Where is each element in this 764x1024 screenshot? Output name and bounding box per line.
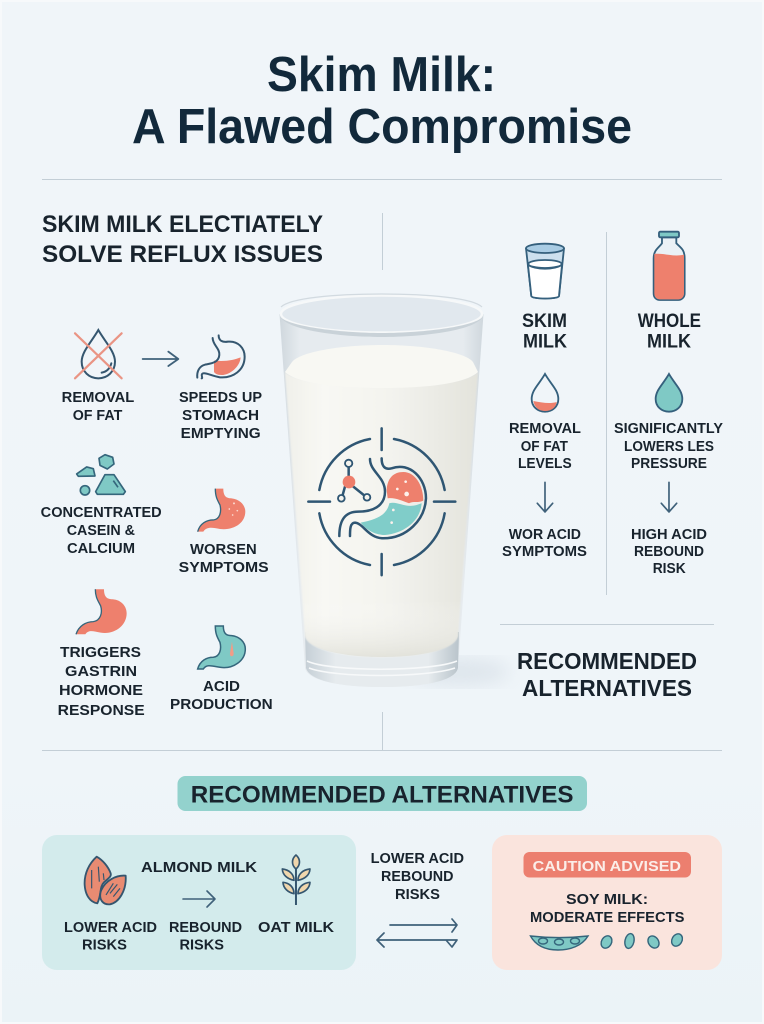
label: significantly lowers les pressure — [614, 421, 723, 472]
milk surface — [285, 345, 478, 388]
heading: recommended alternatives side: ALTERNATIVES — [522, 675, 692, 701]
panel: caution soy milk — [492, 835, 722, 970]
icon: low fat drop — [532, 374, 558, 412]
glass base — [305, 632, 459, 687]
label: worse acid symptoms: WOR ACID — [509, 527, 581, 543]
stomach fill: coral — [387, 472, 423, 503]
label: high acid rebound risk: REBOUND — [634, 544, 704, 560]
label: triggers gastrin hormone response: TRIGGERS — [60, 645, 141, 661]
label: lower acid rebound risks: RISKS — [395, 887, 440, 903]
label: removal of fat: OF FAT — [73, 408, 122, 424]
glass of milk — [280, 294, 510, 687]
label: significantly lowers les pressure: PRESSURE — [631, 456, 707, 472]
icon: almond — [85, 857, 126, 904]
label: skim milk: MILK — [523, 330, 567, 352]
panel: recommended milks: RISKS — [82, 938, 127, 954]
panel: recommended milks: RISKS — [180, 938, 224, 954]
label: concentrated casein and calcium: CONCENTRATED — [41, 505, 162, 521]
label: lower acid rebound risks: REBOUND — [381, 869, 454, 885]
label: worsen symptoms: SYMPTOMS — [179, 560, 269, 576]
label: removal of fat levels: OF FAT — [521, 439, 568, 455]
panel: recommended milks: ALMOND MILK — [141, 860, 258, 876]
arrows: exchange — [377, 919, 457, 947]
panel: recommended milks: LOWER ACID — [64, 920, 157, 936]
glass shadow — [410, 658, 510, 686]
glass body — [280, 314, 484, 687]
label: worse acid symptoms — [502, 527, 587, 560]
label: acid production: PRODUCTION — [170, 697, 273, 713]
stomach outline — [350, 458, 426, 538]
icon: irritated stomach — [198, 489, 245, 532]
label: triggers gastrin hormone response: GASTRIN — [65, 664, 137, 680]
panel: caution soy milk: SOY MILK: — [566, 892, 648, 908]
icon: fat drop crossed out — [75, 330, 122, 378]
label: high acid rebound risk: RISK — [653, 561, 686, 577]
icon: acid production stomach — [198, 626, 245, 669]
label: concentrated casein and calcium — [41, 505, 162, 557]
icon: skim milk glass — [526, 244, 564, 298]
label: worsen symptoms: WORSEN — [190, 542, 257, 558]
icon: stomach emptying — [197, 335, 245, 378]
label: whole milk — [638, 310, 701, 352]
heading: reflux issues: SKIM MILK ELECTIATELY — [42, 211, 323, 238]
heading: reflux issues — [42, 211, 323, 268]
label: skim milk — [522, 310, 567, 352]
target rings and ticks — [308, 428, 455, 575]
label: skim milk: SKIM — [522, 310, 567, 332]
label: worsen symptoms — [179, 542, 269, 576]
title — [132, 48, 632, 154]
badge: caution advised: CAUTION ADVISED — [533, 859, 681, 875]
panel: recommended milks: OAT MILK — [258, 920, 335, 936]
arrow: almond to oat — [183, 891, 215, 907]
label: lower acid rebound risks: LOWER ACID — [371, 851, 464, 867]
label: removal of fat levels: REMOVAL — [509, 421, 581, 437]
label: speeds up stomach emptying — [179, 390, 262, 442]
label: high acid rebound risk: HIGH ACID — [631, 527, 707, 543]
label: high acid rebound risk — [631, 527, 707, 577]
label: removal of fat levels: LEVELS — [518, 456, 572, 472]
panel: recommended milks: REBOUND — [169, 920, 242, 936]
label: whole milk: MILK — [647, 330, 691, 352]
icon: gastrin stomach — [76, 589, 127, 634]
stomach fill: teal — [361, 503, 422, 535]
title: Skim Milk: — [267, 48, 496, 102]
icon: target on stomach — [308, 428, 455, 575]
icon: soybeans — [530, 932, 685, 950]
icon: casein and calcium particles — [77, 455, 125, 495]
label: removal of fat levels — [509, 421, 581, 472]
glass rim — [281, 296, 482, 332]
label: acid production — [170, 679, 273, 713]
badge: caution advised — [524, 852, 691, 878]
title: A Flawed Compromise — [132, 100, 632, 154]
bubbles — [390, 480, 409, 524]
banner: recommended alternatives: RECOMMENDED ALTERNATIVES — [191, 782, 574, 808]
label: lower acid rebound risks — [371, 851, 464, 903]
panel: caution soy milk: MODERATE EFFECTS — [530, 910, 685, 926]
label: acid production: ACID — [203, 679, 240, 695]
label: triggers gastrin hormone response — [58, 645, 145, 719]
heading: recommended alternatives side: RECOMMENDED — [517, 648, 697, 674]
label: worse acid symptoms: SYMPTOMS — [502, 544, 587, 560]
label: concentrated casein and calcium: CALCIUM — [67, 541, 135, 557]
molecule — [343, 467, 365, 496]
label: removal of fat: REMOVAL — [62, 390, 134, 406]
panel: recommended milks — [42, 835, 356, 970]
icon: full fat drop — [656, 374, 682, 412]
arrow: whole down — [661, 482, 677, 512]
label: speeds up stomach emptying: SPEEDS UP — [179, 390, 262, 406]
arrow: fat removal to stomach emptying — [143, 352, 178, 366]
dividers — [42, 180, 722, 750]
label: triggers gastrin hormone response: HORMONE — [59, 683, 143, 699]
label: whole milk: WHOLE — [638, 310, 701, 332]
arrow: skim down — [537, 482, 553, 512]
heading: recommended alternatives side — [517, 648, 697, 701]
label: concentrated casein and calcium: CASEIN & — [67, 523, 136, 539]
label: significantly lowers les pressure: LOWERS LES — [624, 439, 714, 455]
label: significantly lowers les pressure: SIGNIFICANTLY — [614, 421, 723, 437]
label: speeds up stomach emptying: STOMACH — [182, 408, 259, 424]
label: removal of fat — [62, 390, 134, 424]
milk body — [285, 372, 478, 657]
label: speeds up stomach emptying: EMPTYING — [181, 426, 261, 442]
heading: reflux issues: SOLVE REFLUX ISSUES — [42, 241, 323, 268]
label: triggers gastrin hormone response: RESPONSE — [58, 703, 145, 719]
icon: oat — [282, 855, 310, 905]
icon: whole milk bottle — [654, 232, 685, 300]
